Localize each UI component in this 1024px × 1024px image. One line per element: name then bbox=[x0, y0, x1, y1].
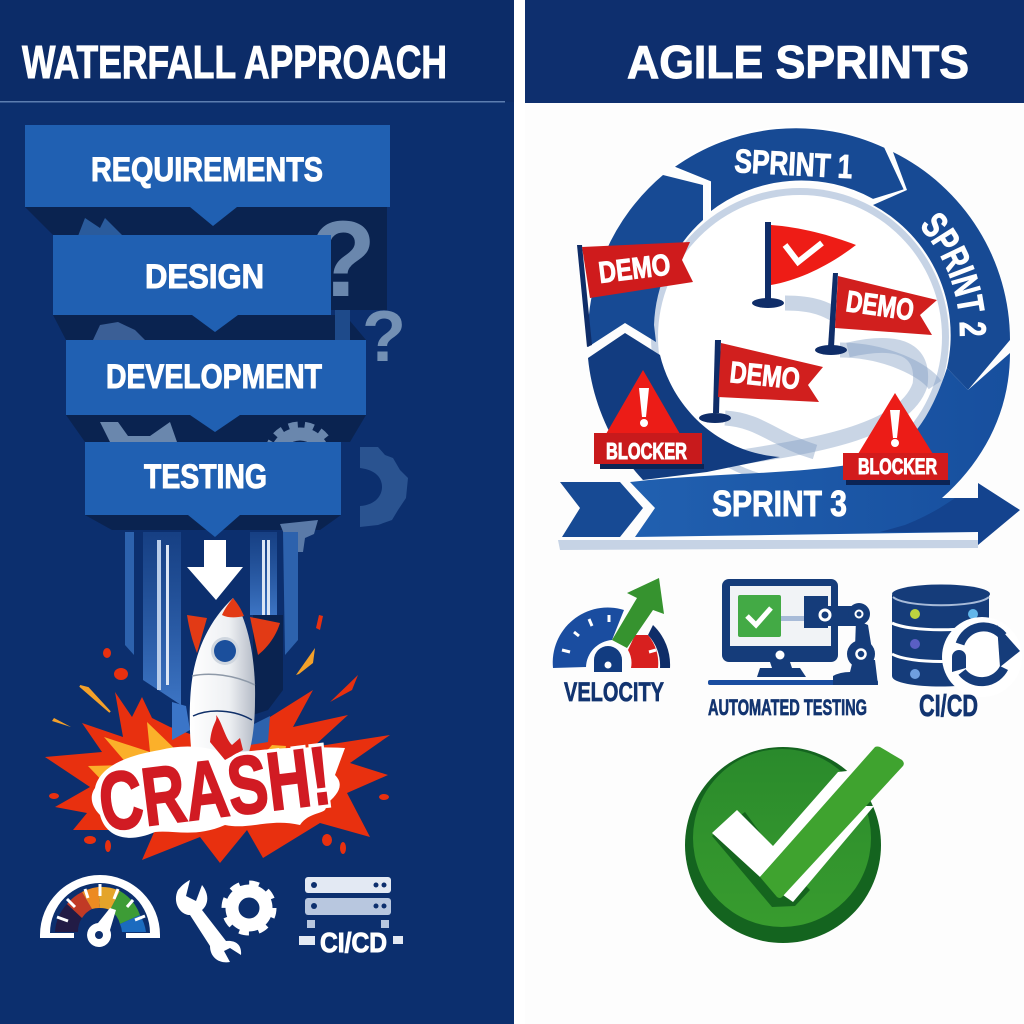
sprint 3 label: SPRINT 3 bbox=[712, 483, 847, 524]
blocker label: BLOCKER bbox=[858, 454, 937, 479]
CI/CD label: CI/CD bbox=[919, 688, 978, 723]
flag: check bbox=[752, 222, 856, 308]
box drop shadows bbox=[25, 207, 387, 530]
arrow: white down arrow bbox=[187, 540, 243, 600]
blocker: right bbox=[843, 393, 950, 485]
step label: TESTING bbox=[144, 458, 267, 496]
panel: waterfall header bbox=[0, 0, 514, 102]
ring segment: lower left bbox=[588, 333, 780, 480]
step label: DESIGN bbox=[145, 258, 264, 296]
sprint path trails bbox=[725, 303, 935, 457]
automated testing label: AUTOMATED TESTING bbox=[708, 695, 867, 720]
faint background icons: question marks and gears bbox=[78, 198, 408, 552]
panel: agile background bbox=[525, 0, 1024, 1024]
icon: gear bbox=[225, 884, 273, 932]
CI/CD label: CI/CD bbox=[320, 927, 387, 958]
crash label: CRASH! bbox=[94, 730, 335, 849]
explosion debris bbox=[49, 615, 389, 854]
sprint 1 arrow bbox=[673, 127, 905, 213]
panel: waterfall background bbox=[0, 0, 514, 1024]
icon: wrench bbox=[176, 880, 241, 962]
flag: right demo bbox=[815, 273, 937, 355]
heading: waterfall approach: WATERFALL APPROACH bbox=[22, 36, 447, 88]
drop shadow under sprint 3 bbox=[558, 540, 978, 550]
icon: crashing rocket bbox=[172, 598, 280, 755]
blocker label: BLOCKER bbox=[606, 438, 687, 464]
icon: velocity gauge with green arrow bbox=[553, 578, 670, 707]
waterfall step: requirements bbox=[25, 125, 390, 226]
panel: agile header bbox=[525, 0, 1024, 103]
ring segment: previous sprint bbox=[588, 175, 703, 347]
sprint cycle diagram bbox=[558, 128, 1020, 550]
half gear right bbox=[360, 447, 408, 527]
waterfall step: development bbox=[66, 340, 366, 432]
flag label: DEMO bbox=[597, 248, 672, 290]
waterfall step: design bbox=[53, 235, 331, 332]
small question mark: ? bbox=[362, 297, 406, 377]
heading: agile sprints: AGILE SPRINTS bbox=[627, 36, 969, 88]
step label: REQUIREMENTS bbox=[91, 151, 323, 189]
velocity label: VELOCITY bbox=[564, 677, 664, 707]
large question mark: ? bbox=[310, 198, 376, 319]
sprint 1 label: SPRINT 1 bbox=[734, 142, 853, 185]
icon: automated testing monitor and robot arm bbox=[708, 579, 878, 720]
robot arm bbox=[804, 596, 878, 685]
crash badge bbox=[92, 715, 345, 849]
crash label weight: CRASH! bbox=[94, 730, 335, 849]
icon: large green check mark bbox=[685, 746, 904, 943]
sprint 2 label: SPRINT 2 bbox=[922, 213, 986, 336]
step label: DEVELOPMENT bbox=[106, 358, 322, 396]
sprint 3 banner arrow bbox=[630, 353, 1010, 537]
flag: centre demo bbox=[699, 340, 823, 423]
flag label: DEMO bbox=[844, 285, 916, 327]
flag: left demo bbox=[577, 242, 693, 347]
arrow head shadow bbox=[880, 483, 1020, 545]
flag label: DEMO bbox=[728, 356, 801, 396]
icon: speed gauge bbox=[40, 875, 160, 947]
icon: explosion burst bbox=[45, 690, 390, 863]
sprint 2 path bbox=[919, 226, 960, 337]
sprint 2 arrow bbox=[873, 152, 1010, 390]
speed streaks bbox=[125, 532, 298, 715]
icon: servers with CI/CD bbox=[299, 877, 403, 958]
sprint 3 tail bbox=[560, 482, 643, 537]
icon: CI/CD database with sync arrows bbox=[892, 584, 1022, 723]
blocker: left bbox=[594, 370, 704, 469]
waterfall step: testing bbox=[85, 442, 341, 537]
